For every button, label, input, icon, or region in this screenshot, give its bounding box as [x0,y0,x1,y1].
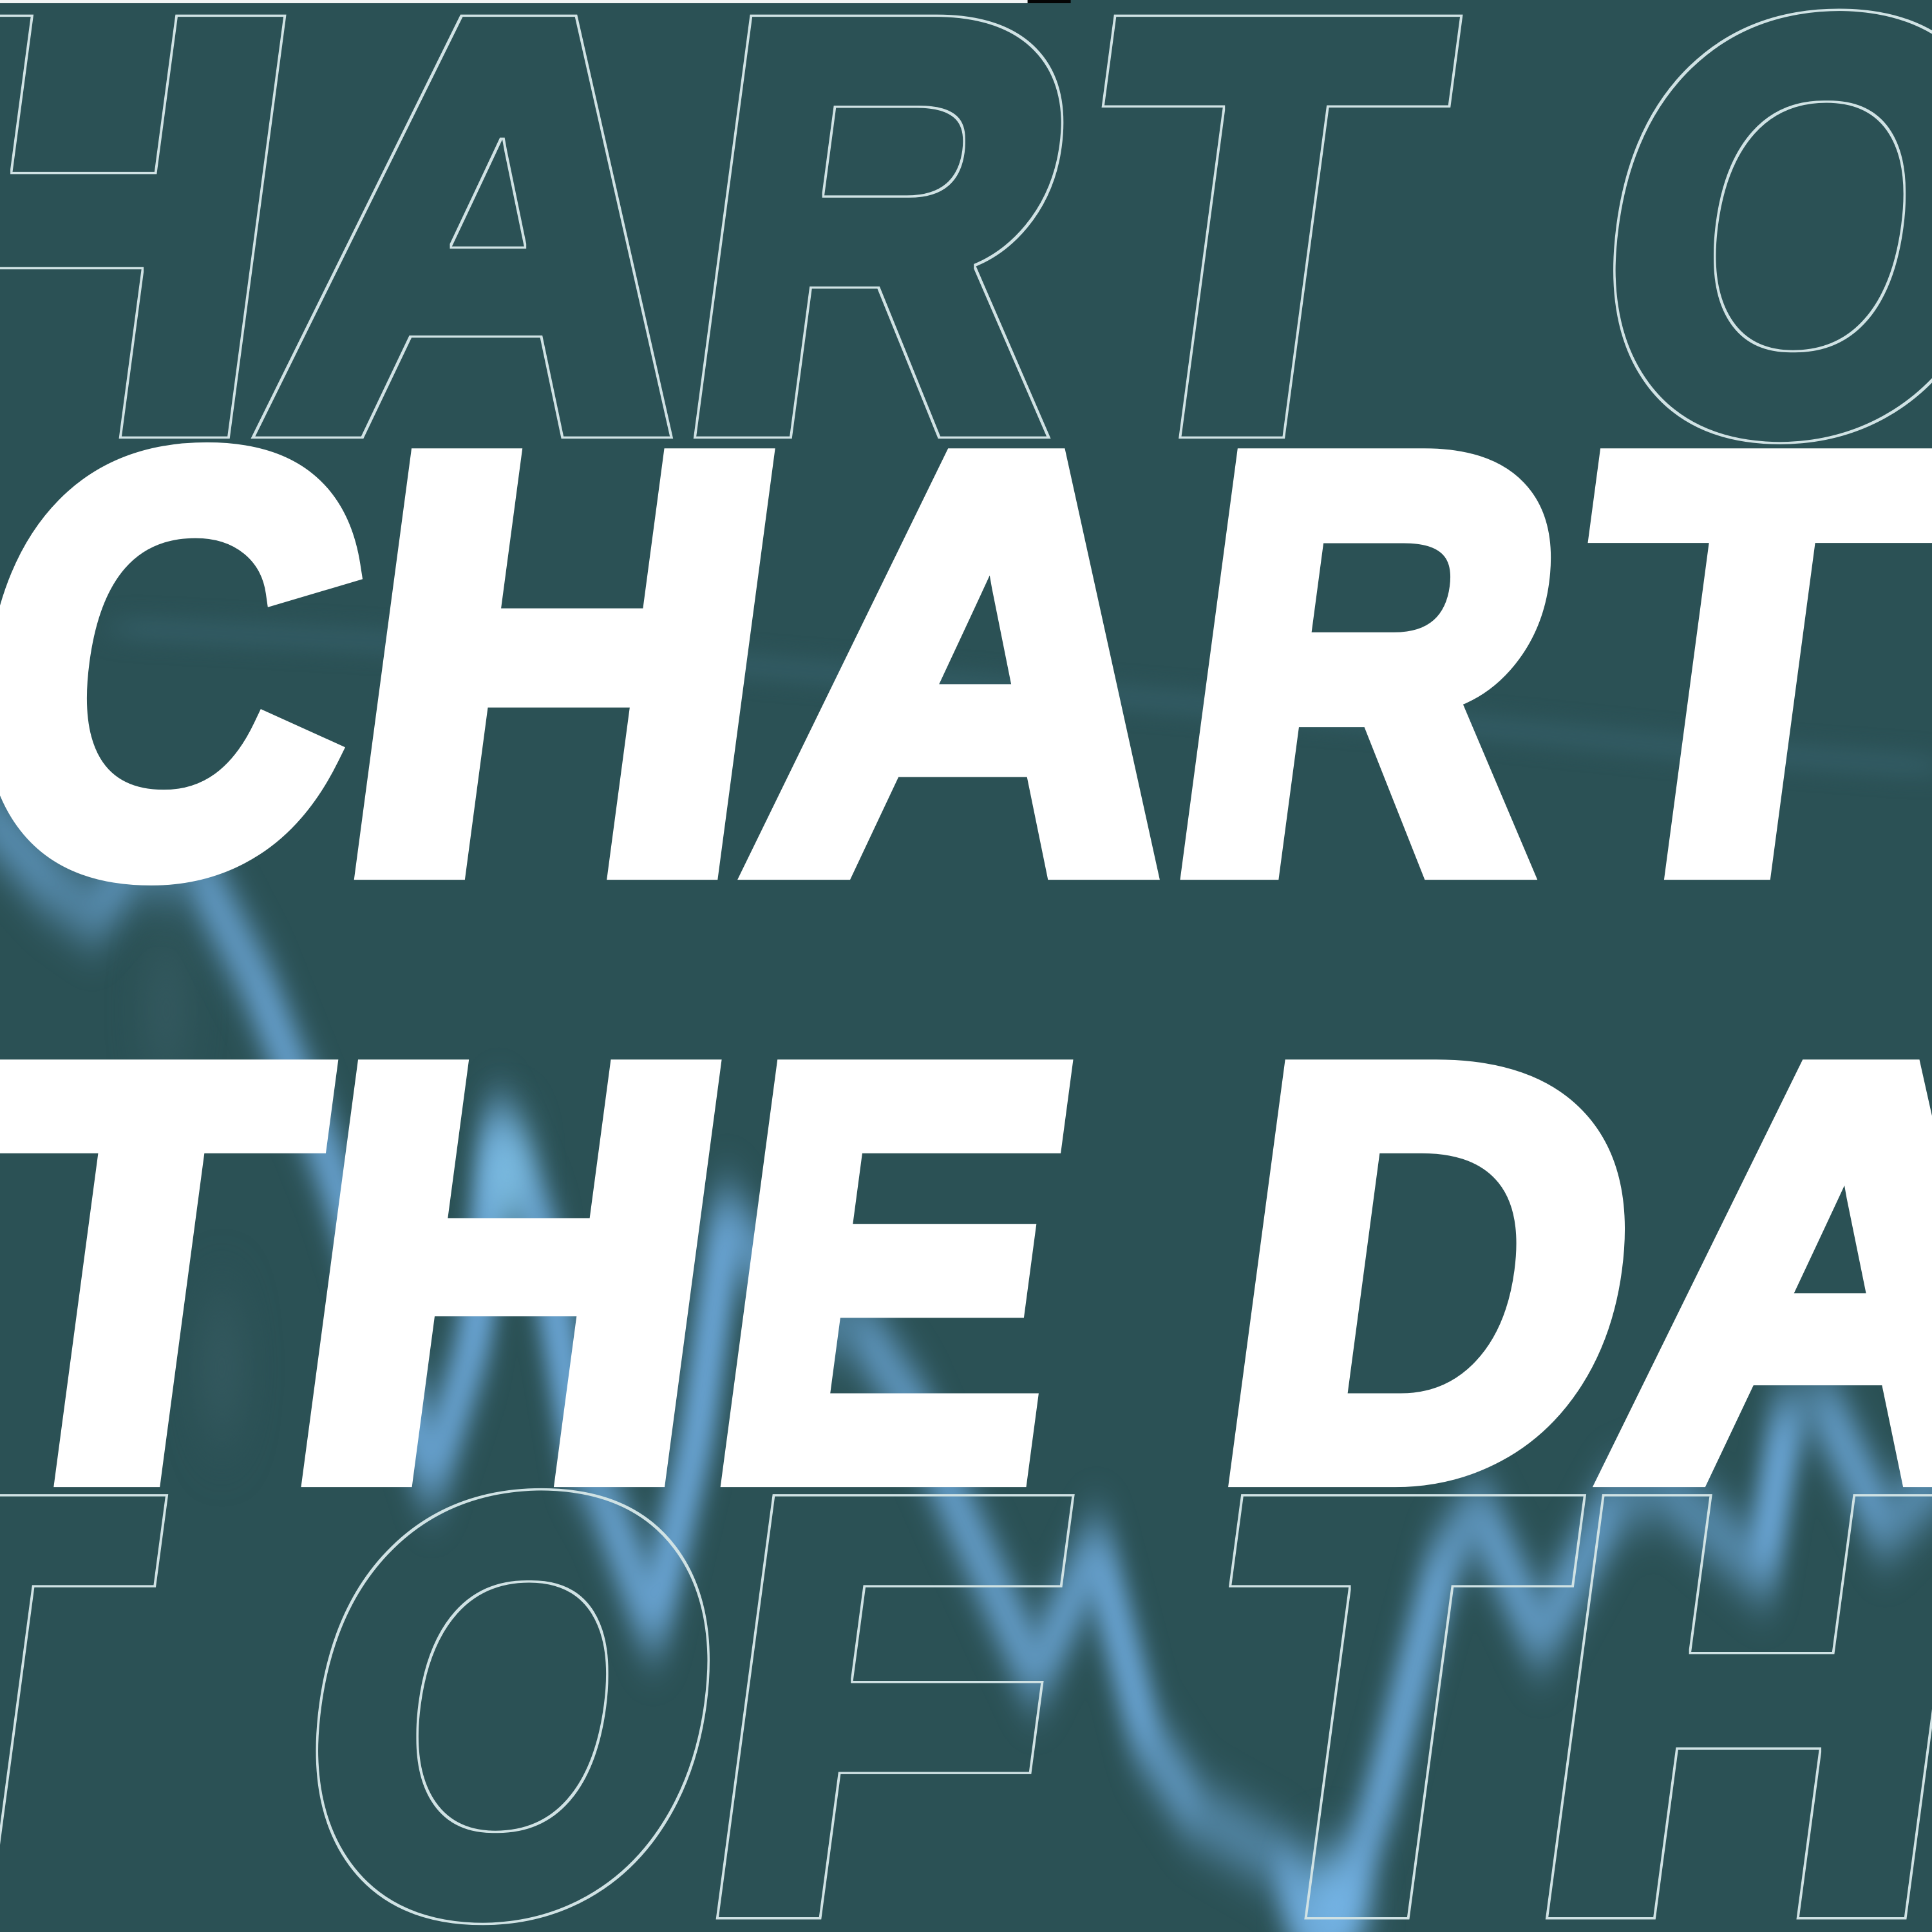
solid headline row 3: THE DA [0,948,1932,1595]
solid headline row 2: CHART [0,336,1932,989]
solid headline row 2: CHART: A [729,337,1227,989]
solid headline row 2: CHART: R [1144,336,1597,989]
solid headline row 3: THE DA: E [685,949,1105,1595]
solid headline row 3: THE DA: D [1191,949,1674,1595]
solid headline row 3: THE DA: H [263,948,761,1595]
outlined headline row 1: HART O [0,0,1932,546]
solid headline row 2: CHART: H [316,337,814,989]
top edge strip [0,0,1071,3]
outlined headline row 4: T OF TH [0,1383,1932,1932]
blurred background line chart [0,629,1932,1932]
